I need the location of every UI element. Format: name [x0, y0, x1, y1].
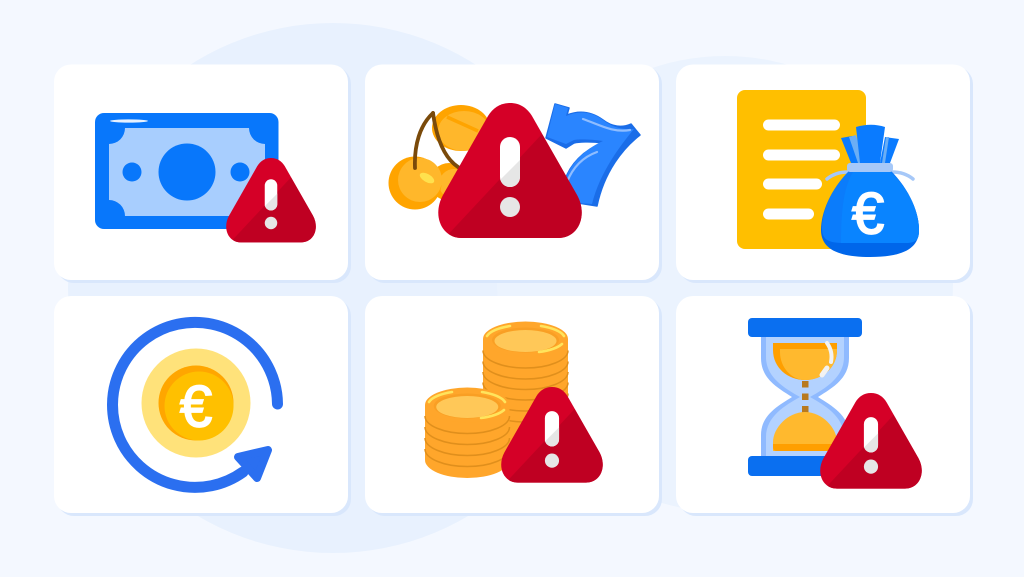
icon: tall coin stack	[483, 322, 568, 446]
icon: hourglass	[748, 318, 862, 476]
icon: warning triangle	[501, 387, 603, 483]
panel: slot symbols warning	[365, 64, 662, 283]
icon: lucky seven	[546, 104, 640, 206]
panel: coin stacks warning	[365, 296, 662, 516]
panel: hourglass warning	[676, 296, 973, 516]
icon: warning triangle	[438, 103, 582, 238]
euro symbol: €	[180, 374, 212, 440]
icon: circular arrow	[113, 322, 278, 487]
background circle: right	[497, 56, 953, 512]
panel: document and money bag	[676, 64, 973, 283]
background circle: left	[68, 23, 598, 553]
panel: banknote warning	[54, 64, 351, 283]
icon: euro coin	[142, 348, 250, 458]
icon: short coin stack	[425, 388, 510, 478]
icon: document	[737, 90, 866, 249]
panel: euro refund cycle	[54, 296, 351, 516]
euro symbol: €	[852, 182, 884, 246]
icon: cherries	[388, 105, 490, 210]
icon: banknote	[95, 113, 278, 229]
icon: money bag	[821, 125, 919, 257]
icon: warning triangle	[820, 393, 922, 489]
icon: warning triangle	[226, 158, 316, 242]
